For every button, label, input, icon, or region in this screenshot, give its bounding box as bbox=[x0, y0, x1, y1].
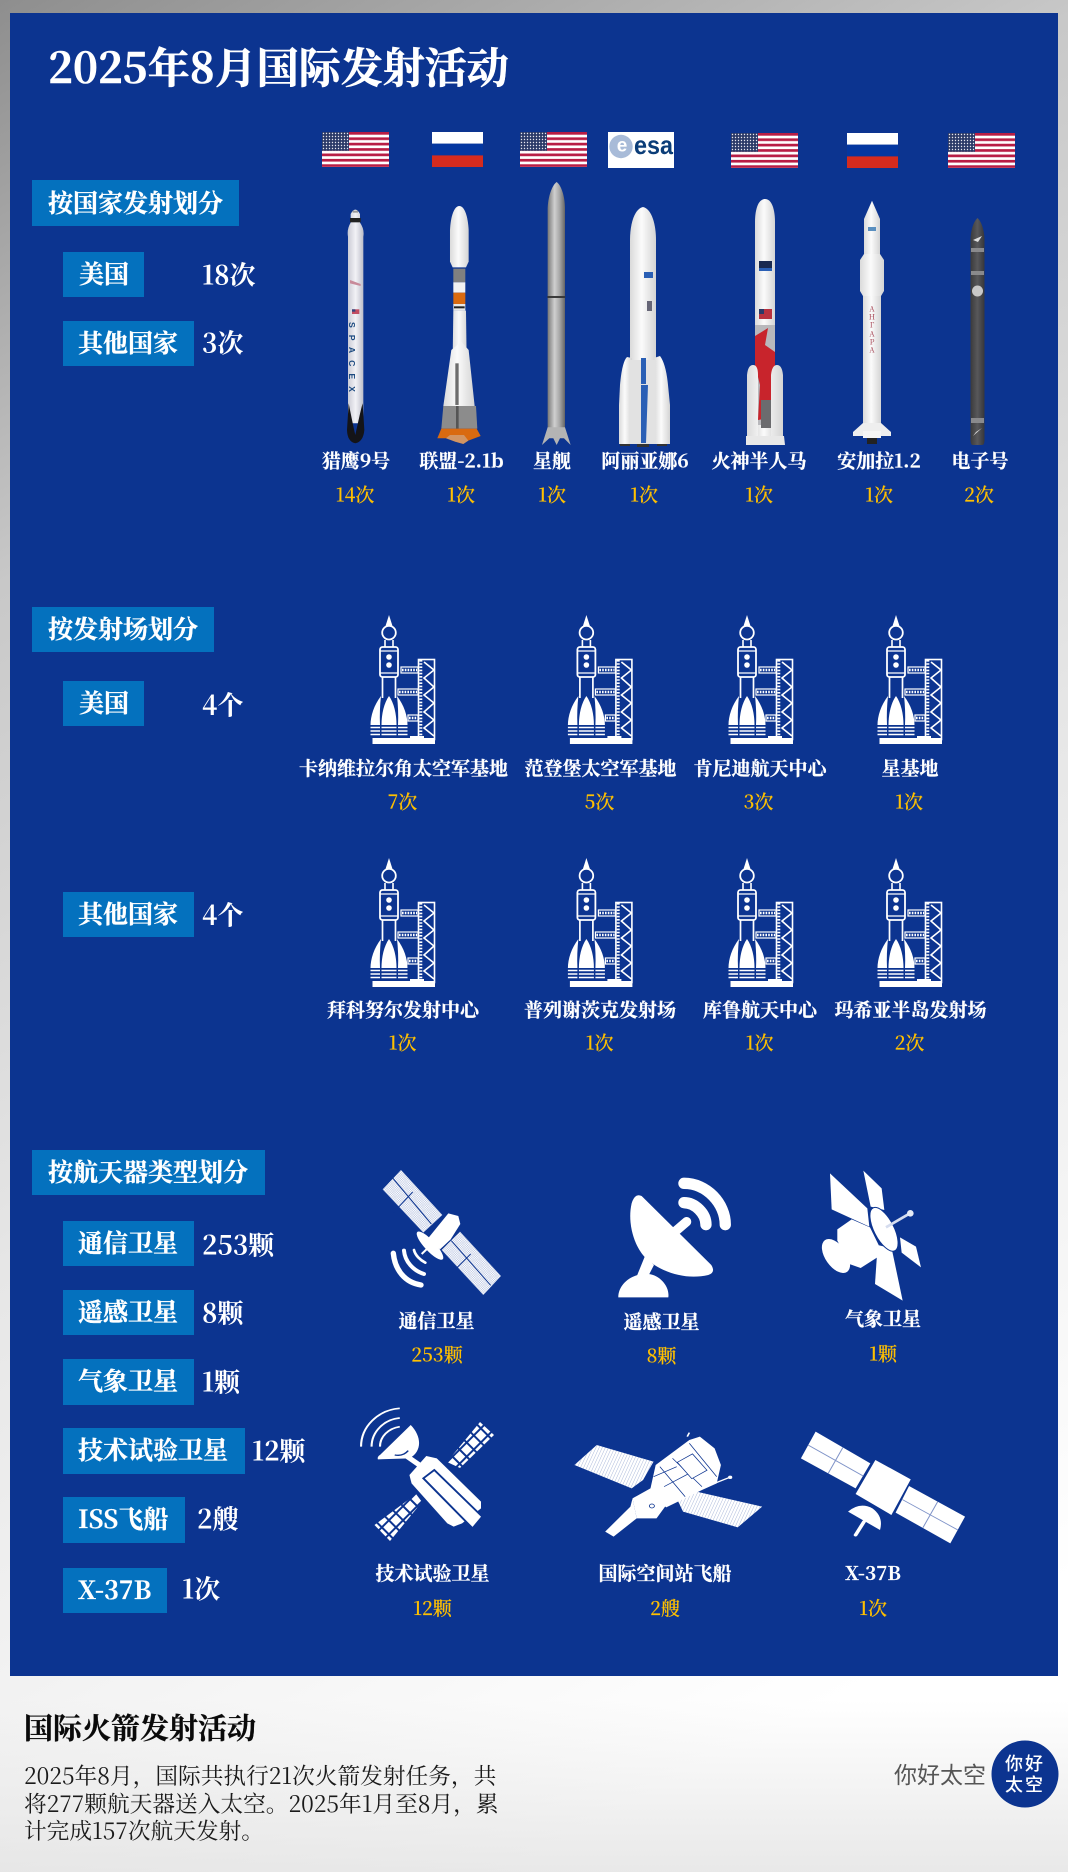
icon: X-37B bbox=[801, 1432, 965, 1543]
rocket name and count: Angara: 安加拉1.2 bbox=[837, 446, 921, 474]
launch site: Starbase bbox=[878, 615, 942, 814]
logo: brand badge bbox=[992, 1740, 1058, 1808]
heading: by spacecraft type bbox=[32, 1150, 265, 1195]
rocket: Angara 1.2 bbox=[853, 201, 891, 444]
label: X-37B: X-37B bbox=[845, 1559, 901, 1586]
tag: ISS spacecraft: ISS飞船 bbox=[78, 1500, 168, 1536]
rocket name and count: Falcon 9 bbox=[322, 446, 390, 508]
tag: other countries sites: 其他国家 bbox=[78, 895, 178, 931]
rocket name and count: Ariane 6 bbox=[601, 446, 689, 508]
launch site: Baikonur: 1次 bbox=[389, 1028, 416, 1056]
rocket: Falcon 9 bbox=[347, 210, 364, 443]
rocket: Angara 1.2: Н bbox=[869, 312, 875, 322]
launch site: Plesetsk: 1次 bbox=[586, 1028, 613, 1056]
launch site: Plesetsk bbox=[524, 858, 676, 1056]
tag: remote sensing satellites: 8颗 bbox=[202, 1294, 245, 1330]
tag: other countries launches: 其他国家 bbox=[78, 324, 178, 360]
label: ISS spacecraft bbox=[598, 1559, 732, 1621]
tag: USA launches bbox=[63, 252, 256, 297]
tag: ISS spacecraft bbox=[63, 1497, 238, 1543]
label: weather satellite: 气象卫星 bbox=[845, 1304, 921, 1332]
launch site: Kourou: 1次 bbox=[746, 1028, 773, 1056]
title: 2025年8月国际发射活动 bbox=[48, 36, 509, 96]
launch site: Kennedy bbox=[693, 615, 829, 814]
rocket name and count: Soyuz bbox=[419, 446, 504, 508]
tag: USA launches: 美国 bbox=[79, 255, 129, 291]
tag: X-37B bbox=[63, 1568, 220, 1613]
panel: launches by launch site bbox=[32, 607, 243, 937]
heading: by spacecraft type: 按航天器类型划分 bbox=[48, 1153, 248, 1189]
rocket name and count: Electron bbox=[951, 446, 1009, 508]
tag: USA launches: 18次 bbox=[202, 256, 256, 292]
rocket: Angara 1.2: А bbox=[869, 344, 875, 356]
logo: brand badge: 你好 bbox=[1005, 1750, 1045, 1776]
launch site: Vandenberg: 范登堡太空军基地 bbox=[524, 754, 677, 781]
launch site: Kourou: 库鲁航天中心 bbox=[703, 996, 820, 1022]
tag: weather satellites: 气象卫星 bbox=[78, 1362, 178, 1398]
tag: communication satellites bbox=[63, 1221, 276, 1266]
launch site: Baikonur: 拜科努尔发射中心 bbox=[327, 996, 482, 1022]
label: technology test satellite: 12颗 bbox=[413, 1594, 453, 1621]
footer description: 将277颗航天器送入太空。2025年1月至8月，累 bbox=[24, 1787, 499, 1819]
tag: communication satellites: 通信卫星 bbox=[78, 1224, 178, 1260]
rocket name and count: Ariane 6: 1次 bbox=[630, 480, 658, 508]
tag: weather satellites bbox=[63, 1359, 242, 1405]
launch site: Baikonur bbox=[327, 858, 482, 1056]
launch site: Kourou bbox=[703, 858, 820, 1056]
label: weather satellite: 1颗 bbox=[869, 1340, 898, 1366]
flag: USA bbox=[520, 132, 587, 167]
logo: ESA: esa bbox=[634, 130, 673, 160]
icon: communication satellite bbox=[383, 1170, 501, 1295]
label: technology test satellite bbox=[375, 1559, 490, 1621]
tag: X-37B: 1次 bbox=[182, 1570, 220, 1606]
panel: spacecraft by type bbox=[32, 1150, 308, 1613]
flag: Russia bbox=[432, 132, 483, 167]
rocket name and count: Vulcan Centaur: 火神半人马 bbox=[711, 446, 807, 474]
rocket: Angara 1.2: А bbox=[869, 328, 875, 340]
flags row bbox=[322, 130, 1015, 168]
tag: other countries sites: 4个 bbox=[202, 896, 243, 932]
rocket name and count: Soyuz: 联盟-2.1b bbox=[419, 446, 504, 474]
launch site: Kennedy: 肯尼迪航天中心 bbox=[693, 754, 829, 781]
tag: remote sensing satellites bbox=[63, 1290, 245, 1335]
label: remote sensing satellite: 8颗 bbox=[647, 1342, 677, 1368]
tag: technology test satellites: 技术试验卫星 bbox=[78, 1431, 228, 1467]
footer description: 计完成157次航天发射。 bbox=[24, 1814, 264, 1846]
footer description: 2025年8月，国际共执行21次火箭发射任务，共 bbox=[24, 1759, 496, 1791]
rocket: Falcon 9: SPACEX bbox=[347, 322, 357, 399]
label: X-37B: 1次 bbox=[859, 1594, 887, 1621]
rocket name and count: Starship: 1次 bbox=[538, 480, 566, 508]
launch site: Mahia: 2次 bbox=[895, 1028, 924, 1056]
rocket name and count: Falcon 9: 14次 bbox=[336, 480, 374, 508]
brand name: 你好太空 bbox=[894, 1756, 986, 1790]
rocket name and count: Angara: 1次 bbox=[865, 480, 893, 508]
rocket name and count: Angara bbox=[837, 446, 921, 508]
label: communication satellite bbox=[398, 1306, 475, 1368]
icon: weather satellite bbox=[816, 1171, 921, 1301]
rocket: Angara 1.2: А bbox=[869, 304, 875, 314]
tag: communication satellites: 253颗 bbox=[202, 1226, 276, 1262]
rocket: Starship bbox=[542, 182, 571, 445]
tag: other countries launches: 3次 bbox=[202, 324, 243, 360]
label: remote sensing satellite: 遥感卫星 bbox=[623, 1308, 700, 1334]
rocket name and count: Ariane 6: 阿丽亚娜6 bbox=[601, 446, 689, 474]
launch site: Cape Canaveral: 7次 bbox=[388, 788, 417, 814]
label: remote sensing satellite bbox=[623, 1308, 700, 1368]
tag: ISS spacecraft: 2艘 bbox=[197, 1500, 238, 1536]
panel: launches by country bbox=[32, 180, 256, 366]
icon: technology test satellite bbox=[361, 1408, 494, 1541]
rocket name and count: Electron: 2次 bbox=[964, 480, 994, 508]
flag: Russia bbox=[847, 133, 898, 168]
launch site: Vandenberg bbox=[524, 615, 677, 814]
launch site: Cape Canaveral bbox=[299, 615, 508, 814]
rocket: Soyuz-2.1b bbox=[437, 206, 481, 444]
launch site: Starbase: 星基地 bbox=[881, 754, 939, 781]
tag: remote sensing satellites: 遥感卫星 bbox=[78, 1293, 178, 1329]
launch site: Plesetsk: 普列谢茨克发射场 bbox=[524, 996, 676, 1022]
rocket name and count: Starship: 星舰 bbox=[533, 446, 571, 474]
tag: other countries launches bbox=[63, 321, 243, 366]
icon: ISS spacecraft bbox=[574, 1433, 762, 1537]
launch site: Kennedy: 3次 bbox=[744, 788, 773, 814]
footer description bbox=[24, 1759, 499, 1846]
rocket name and count: Starship bbox=[533, 446, 571, 508]
rocket name and count: Vulcan Centaur: 1次 bbox=[745, 480, 773, 508]
heading: by country: 按国家发射划分 bbox=[48, 184, 223, 220]
logo: ESA: e bbox=[617, 136, 627, 156]
rocket name and count: Vulcan Centaur bbox=[711, 446, 807, 508]
rocket: Electron bbox=[970, 218, 984, 445]
launch site: Mahia bbox=[834, 858, 987, 1056]
label: communication satellite: 253颗 bbox=[411, 1340, 464, 1368]
rocket name and count: Soyuz: 1次 bbox=[447, 480, 475, 508]
label: ISS spacecraft: 2艘 bbox=[650, 1594, 680, 1621]
heading: by launch site bbox=[32, 607, 214, 652]
label: weather satellite bbox=[845, 1304, 921, 1366]
label: ISS spacecraft: 国际空间站飞船 bbox=[598, 1559, 732, 1586]
logo: brand badge: 太空 bbox=[1005, 1771, 1045, 1797]
rocket: Ariane 6 bbox=[619, 207, 670, 447]
heading: by country bbox=[32, 180, 239, 226]
flag: USA bbox=[322, 132, 389, 167]
tag: USA sites bbox=[63, 681, 243, 726]
tag: USA sites: 4个 bbox=[202, 686, 243, 722]
tag: other countries sites bbox=[63, 892, 243, 937]
flag: USA bbox=[948, 133, 1015, 168]
rocket: Angara 1.2: Г bbox=[870, 320, 875, 330]
tag: X-37B: X-37B bbox=[78, 1571, 151, 1607]
tag: USA sites: 美国 bbox=[79, 684, 129, 720]
rocket name and count: Electron: 电子号 bbox=[951, 446, 1009, 474]
heading: by launch site: 按发射场划分 bbox=[48, 610, 198, 646]
tag: weather satellites: 1颗 bbox=[202, 1362, 242, 1400]
tag: technology test satellites bbox=[63, 1428, 308, 1474]
icon: remote sensing dish bbox=[618, 1183, 725, 1297]
launch site: Mahia: 玛希亚半岛发射场 bbox=[834, 996, 987, 1022]
flag: USA bbox=[731, 133, 798, 168]
rocket: Angara 1.2: Р bbox=[870, 336, 875, 348]
label: technology test satellite: 技术试验卫星 bbox=[375, 1559, 490, 1586]
footer heading: 国际火箭发射活动 bbox=[24, 1706, 256, 1748]
launch site: Vandenberg: 5次 bbox=[585, 788, 614, 814]
label: X-37B bbox=[845, 1559, 901, 1621]
rocket: Vulcan Centaur bbox=[746, 199, 785, 445]
launch site: Starbase: 1次 bbox=[895, 788, 923, 814]
tag: technology test satellites: 12颗 bbox=[252, 1432, 308, 1468]
label: communication satellite: 通信卫星 bbox=[398, 1306, 475, 1334]
logo: ESA bbox=[608, 130, 674, 168]
rocket name and count: Falcon 9: 猎鹰9号 bbox=[322, 446, 390, 474]
rocket labels and counts bbox=[322, 446, 1009, 508]
launch site: Cape Canaveral: 卡纳维拉尔角太空军基地 bbox=[299, 754, 508, 781]
